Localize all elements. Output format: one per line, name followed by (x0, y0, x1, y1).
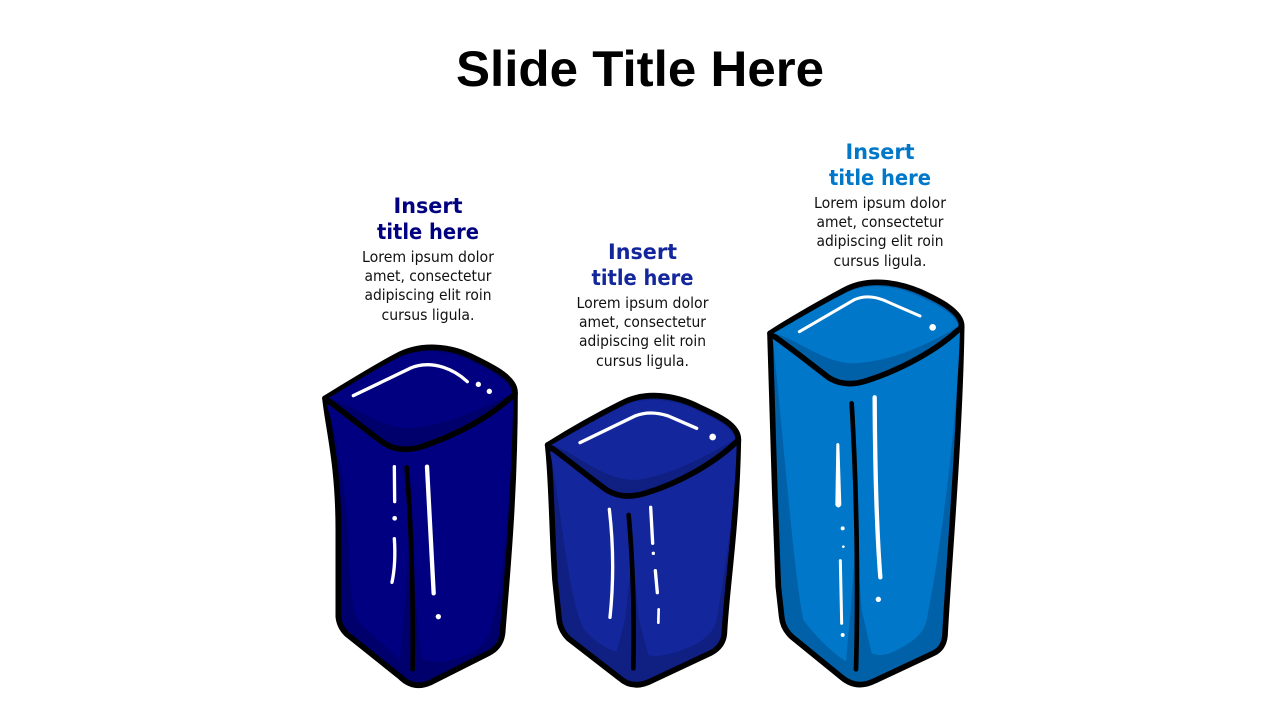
text block: cup 2: adipiscing elit roin (579, 332, 706, 350)
text block: cup 3: amet, consectetur (816, 213, 944, 231)
icon: royal blue cup (548, 396, 738, 685)
text block: cup 1: amet, consectetur (364, 267, 492, 285)
body highlights (835, 443, 841, 507)
front edge (629, 515, 634, 668)
heading: cup 3: Insert (846, 140, 914, 164)
title: Slide Title Here (456, 41, 824, 97)
text block: cup 2: Lorem ipsum dolor (576, 294, 709, 312)
heading: cup 2: title here (592, 266, 694, 290)
text block: cup 3: cursus ligula. (834, 252, 926, 270)
body highlights (389, 467, 400, 502)
text block: cup 2: amet, consectetur (579, 313, 707, 331)
heading: cup 3: title here (829, 166, 931, 190)
icon: navy cup (325, 347, 515, 685)
text block: cup 1: cursus ligula. (382, 306, 474, 324)
lid highlight (799, 297, 920, 332)
text block: cup 3: Lorem ipsum dolor (814, 194, 947, 212)
heading: cup 2 (592, 240, 694, 290)
icon: light blue cup (770, 282, 962, 685)
text block: cup 1 (362, 248, 495, 324)
text block: cup 1: adipiscing elit roin (364, 286, 492, 304)
heading: cup 3 (829, 140, 931, 190)
front edge (852, 403, 857, 669)
text block: cup 2: cursus ligula. (596, 352, 689, 370)
text block: cup 2 (576, 294, 709, 370)
front edge (407, 467, 413, 669)
lid highlight (580, 413, 697, 443)
panel: cup 2 (548, 240, 738, 685)
lid highlight (353, 365, 467, 396)
panel: cup 3 (770, 140, 962, 685)
text block: cup 1: Lorem ipsum dolor (362, 248, 495, 266)
heading: cup 1: Insert (394, 194, 462, 218)
heading: cup 1: title here (377, 220, 479, 244)
text block: cup 3 (814, 194, 947, 270)
text block: cup 3: adipiscing elit roin (816, 232, 944, 250)
body highlights (609, 509, 613, 617)
panel: cup 1 (325, 194, 515, 685)
heading: cup 1 (377, 194, 479, 244)
heading: cup 2: Insert (608, 240, 677, 264)
